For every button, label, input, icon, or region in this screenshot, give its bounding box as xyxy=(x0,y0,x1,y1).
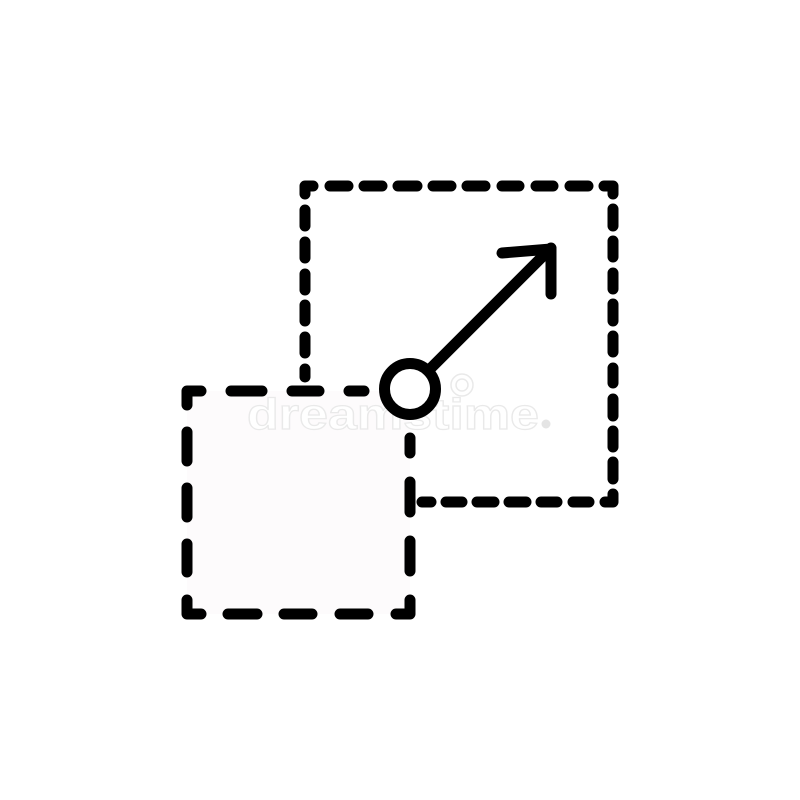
watermark xyxy=(247,374,550,439)
original dashed square xyxy=(187,391,410,614)
panel: lower square fill xyxy=(187,391,410,614)
drag handle circle xyxy=(384,364,436,414)
arrow xyxy=(428,248,551,371)
enlarged dashed square xyxy=(305,186,613,502)
watermark: dreamstime xyxy=(247,390,539,439)
